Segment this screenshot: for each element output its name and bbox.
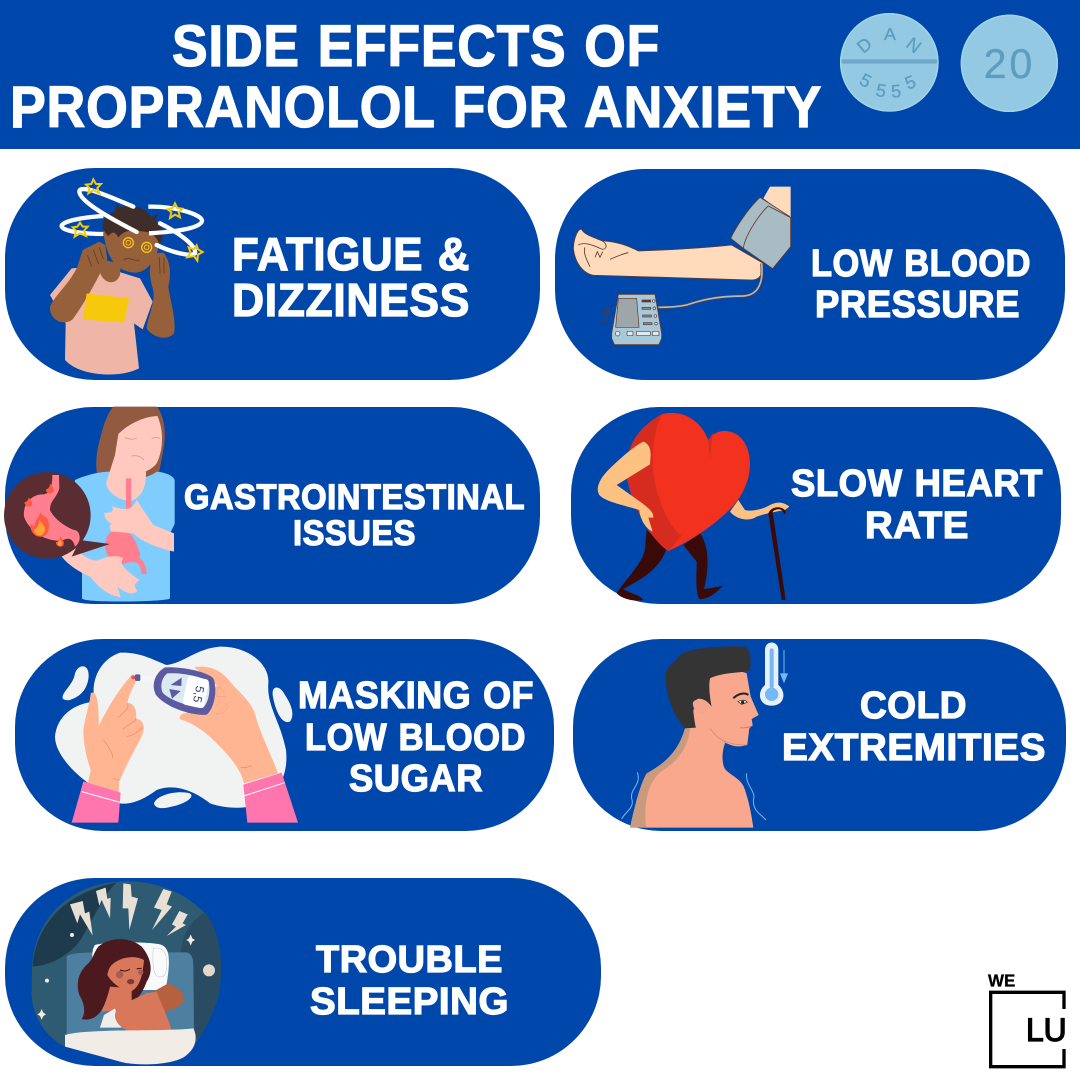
icon: hands with glucose meter [55, 647, 298, 823]
title: SIDE EFFECTS OF [172, 14, 660, 79]
icon: woman unable to sleep [32, 881, 221, 1064]
panel: masking of low blood sugar [15, 639, 554, 831]
panel: cold extremities [573, 639, 1066, 831]
tablet: DAN 5555: 5 [856, 70, 875, 92]
tablet: DAN 5555: D [853, 34, 876, 57]
label: trouble sleeping: SLEEPING [310, 981, 509, 1023]
label: cold extremities: COLD [860, 685, 967, 727]
logo: We Level Up: WE [988, 971, 1015, 991]
header band [0, 0, 1080, 149]
tablet: DAN 5555: 5 [902, 71, 919, 94]
label: trouble sleeping: TROUBLE [316, 939, 503, 981]
panel: fatigue and dizziness [5, 168, 540, 380]
tablet: DAN 5555: A [884, 24, 896, 44]
label: slow heart rate [791, 463, 1043, 547]
label: low blood pressure [811, 243, 1031, 326]
label: masking of low blood sugar: MASKING OF [298, 675, 534, 717]
label: fatigue and dizziness: DIZZINESS [232, 274, 470, 326]
icon: blood pressure cuff [573, 187, 791, 345]
icon: hands with glucose meter: 5,5 [190, 685, 207, 704]
label: masking of low blood sugar: SUGAR [349, 758, 483, 800]
label: fatigue and dizziness: FATIGUE & [232, 228, 470, 280]
label: low blood pressure: PRESSURE [815, 284, 1020, 326]
panel: low blood pressure [555, 169, 1065, 380]
icon: woman with stomach burn [4, 407, 175, 601]
label: trouble sleeping [310, 939, 509, 1023]
panel: gastrointestinal issues [4, 407, 540, 604]
tablet: DAN 5555: 5 [874, 80, 888, 101]
tablet: DAN 5555 [840, 13, 939, 112]
label: gastrointestinal issues: ISSUES [293, 514, 416, 553]
title [10, 14, 822, 140]
label: masking of low blood sugar: LOW BLOOD [305, 717, 526, 759]
tablet: 20 [961, 15, 1058, 112]
icon: man with thermometer [622, 642, 788, 828]
label: cold extremities: EXTREMITIES [782, 727, 1046, 769]
title: PROPRANOLOL FOR ANXIETY [10, 75, 822, 140]
label: low blood pressure: LOW BLOOD [811, 243, 1031, 285]
label: cold extremities [782, 685, 1046, 769]
label: gastrointestinal issues [184, 478, 525, 553]
icon: heart walking with cane [598, 413, 789, 601]
tablet: DAN 5555: 5 [890, 81, 902, 102]
logo: We Level Up: LU [1026, 1011, 1067, 1048]
tablet: 20: 20 [984, 41, 1035, 87]
logo: We Level Up [988, 971, 1067, 1067]
label: gastrointestinal issues: GASTROINTESTINAL [184, 478, 525, 517]
label: masking of low blood sugar [298, 675, 534, 800]
panel: slow heart rate [571, 407, 1061, 604]
label: slow heart rate: SLOW HEART [791, 463, 1043, 505]
icon: dizzy man [50, 179, 203, 375]
label: fatigue and dizziness [232, 228, 470, 326]
label: slow heart rate: RATE [865, 505, 969, 547]
panel: trouble sleeping [5, 878, 601, 1066]
tablet: DAN 5555: N [902, 33, 925, 57]
